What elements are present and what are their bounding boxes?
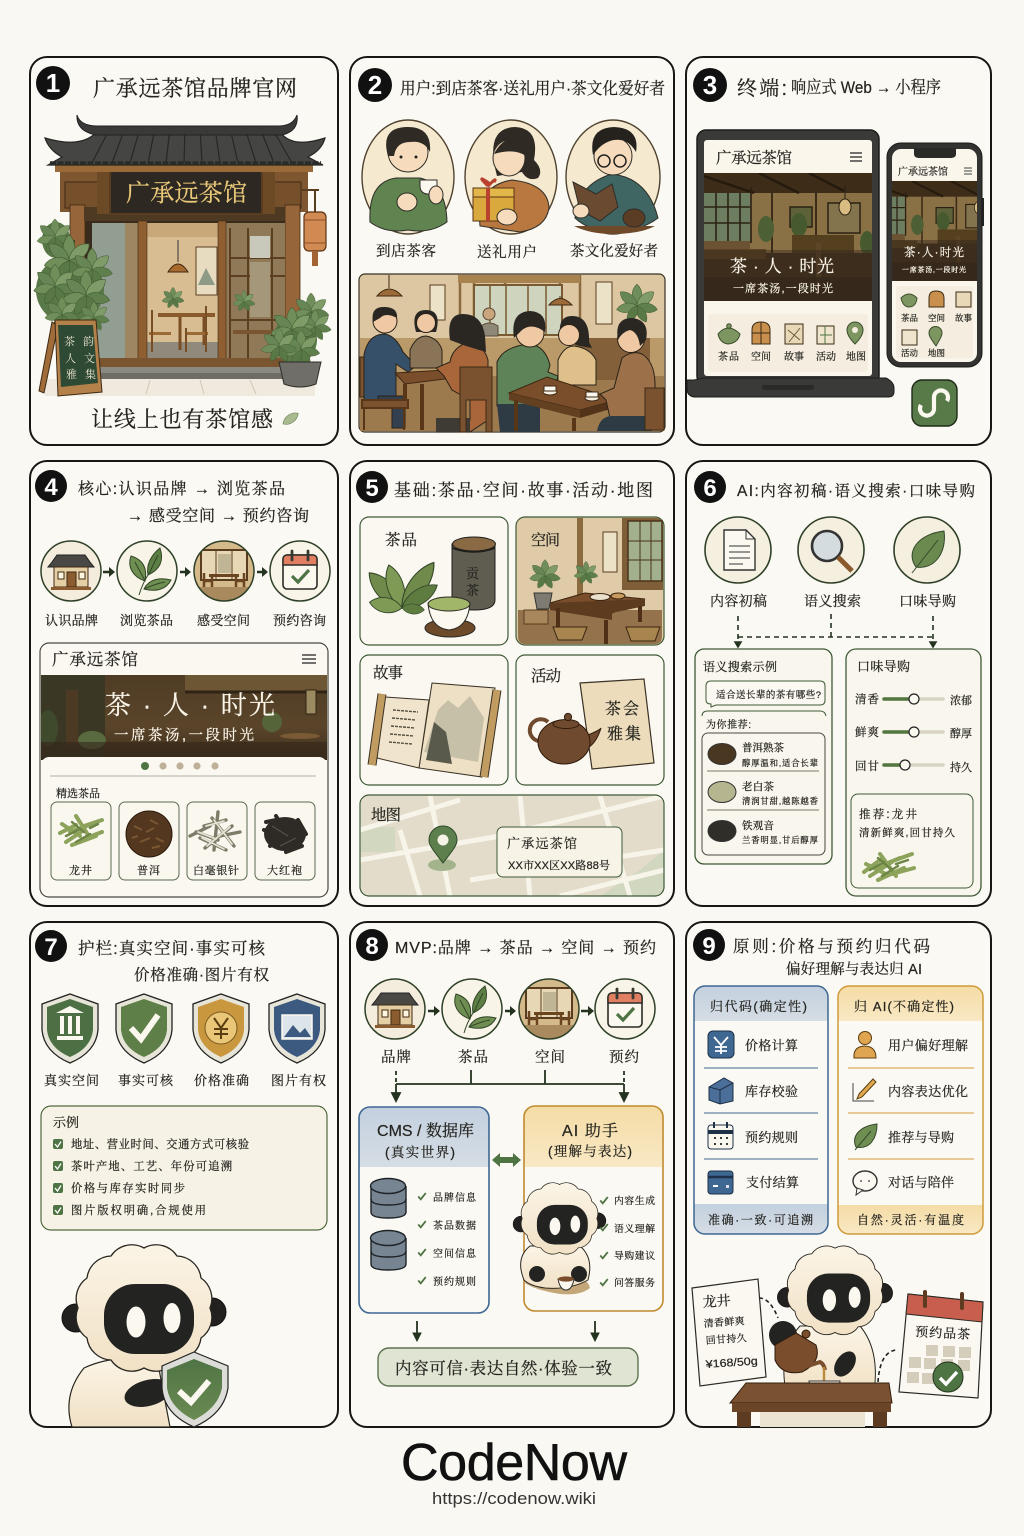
recommendation: 推荐:龙井 [859, 807, 918, 821]
mascot with tea [513, 1183, 606, 1294]
checklist: 预约规则 [433, 1275, 476, 1288]
brown woman [410, 336, 442, 368]
note card: 清香鲜爽 [703, 1314, 745, 1330]
sandwich board sign: 雅集 [66, 367, 96, 381]
green man [497, 344, 558, 406]
step flow [41, 541, 330, 601]
example box: 地址、营业时间、交通方式可核验 [71, 1137, 249, 1151]
result pill [378, 1348, 638, 1386]
phone nav icons: 茶品 [901, 313, 918, 323]
phone mockup [869, 143, 1002, 367]
tea card: longjing [51, 802, 111, 880]
arrow: bidirectional [492, 1153, 521, 1167]
example box: 茶叶产地、工艺、年份可追溯 [71, 1159, 232, 1173]
card: map [360, 795, 664, 896]
step labels: 品牌 [381, 1049, 411, 1066]
slider: freshness [855, 725, 972, 740]
card: map: 广承远茶馆 [507, 836, 577, 851]
laptop nav icons [718, 322, 866, 363]
result: white tea: 清润甘甜,越陈越香 [742, 796, 819, 806]
panel 6: AI [686, 461, 991, 906]
badge 5: 5 [365, 475, 379, 502]
panel 2: users [350, 57, 674, 445]
example box: 价格与库存实时同步 [71, 1181, 185, 1195]
phone mockup: 茶·人·时光 [904, 245, 964, 259]
calendar [899, 1292, 983, 1398]
card: semantic search example: 为你推荐: [706, 718, 751, 731]
title line 2: 偏好理解与表达归 AI [786, 960, 922, 978]
slider: aftertaste: 持久 [950, 760, 972, 774]
result: tieguanyin: 铁观音 [742, 819, 774, 832]
title: core: 核心:认识品牌 → 浏览茶品 [78, 480, 285, 498]
step labels: 浏览茶品 [120, 613, 173, 628]
step labels [381, 1048, 639, 1066]
column: code: 价格计算 [745, 1038, 798, 1053]
background guest [483, 308, 495, 320]
badge 3: 3 [703, 70, 717, 100]
icon: leaf [894, 517, 960, 583]
step labels: 茶品 [458, 1048, 488, 1066]
card: story [360, 655, 508, 785]
illustration: teahouse storefront: 广承远茶馆 [126, 180, 247, 207]
slider: freshness: 醇厚 [950, 726, 972, 740]
column: code: 支付结算 [746, 1175, 799, 1190]
icon: box [709, 1078, 733, 1104]
title: AI: AI:内容初稿·语义搜索·口味导购 [737, 481, 975, 500]
step labels: 认识品牌 [45, 613, 98, 628]
card: semantic search example: 适合送长辈的茶有哪些? [716, 689, 821, 701]
tea card: silver needle: 白毫银针 [193, 863, 239, 877]
shield: image rights [269, 994, 325, 1063]
title: terminals: 响应式 Web → 小程序 [791, 78, 941, 97]
tea card: da hong pao [255, 802, 315, 880]
dashed arrows [759, 1298, 896, 1382]
title line 2: 价格准确·图片有权 [134, 966, 269, 984]
label: 茶文化爱好者 [570, 242, 658, 260]
shield: real space [42, 994, 98, 1063]
card: tea: 贡 [466, 566, 480, 581]
title line 2: → 感受空间 → 预约咨询 [127, 507, 309, 525]
slider: aftertaste: 回甘 [855, 759, 880, 773]
table [730, 1383, 892, 1427]
laptop mockup: 一席茶汤,一段时光 [733, 281, 833, 295]
badge 5 [356, 471, 388, 503]
badge 8: 8 [365, 933, 379, 960]
note card: 龙井 [702, 1292, 731, 1310]
illustration: teahouse storefront [33, 115, 332, 396]
teapot [775, 1330, 825, 1384]
phone nav icons: 地图 [928, 348, 945, 358]
title: foundations: 基础:茶品·空间·故事·活动·地图 [394, 481, 653, 500]
checklist [418, 1191, 477, 1288]
illustration: people in teahouse [359, 274, 665, 432]
result: white tea [708, 780, 819, 806]
slogan: 让线上也有茶馆感 [91, 407, 273, 432]
laptop nav icons: 故事 [784, 350, 804, 363]
sandwich board sign: 茶韵 [64, 334, 94, 348]
result: white tea: 老白茶 [742, 780, 774, 793]
panel 5: foundations [350, 461, 674, 906]
checklist: 内容生成 [614, 1194, 655, 1207]
labels: 语义搜索 [804, 593, 861, 609]
column: code: 归代码(确定性) [710, 999, 807, 1014]
website mockup: 茶 · 人 · 时光 [105, 690, 275, 720]
laptop mockup: 茶 · 人 · 时光 [730, 257, 834, 276]
icon: leaf [855, 1124, 877, 1150]
labels [710, 593, 956, 609]
result: tieguanyin [708, 819, 819, 845]
badge 3 [693, 68, 727, 102]
badge 7 [35, 930, 67, 962]
step labels: 感受空间 [197, 613, 250, 628]
mascot with shield [62, 1245, 228, 1427]
recommendation: 清新鲜爽,回甘持久 [859, 826, 956, 839]
column: AI: 用户偏好理解 [888, 1038, 968, 1053]
laptop mockup [687, 130, 894, 397]
badge 7: 7 [44, 934, 58, 961]
website mockup [38, 643, 328, 897]
note card: 回甘持久 [705, 1331, 747, 1347]
tea card: puer [119, 802, 179, 880]
badge 2: 2 [368, 70, 382, 100]
title: MVP: MVP:品牌 → 茶品 → 空间 → 预约 [395, 939, 656, 957]
badge 2 [358, 68, 392, 102]
laptop mockup: 广承远茶馆 [716, 149, 792, 167]
plant: left shrub [33, 219, 113, 332]
card: CMS [359, 1107, 489, 1313]
laptop nav icons: 活动 [816, 350, 836, 363]
shield: accurate price [193, 994, 249, 1063]
website mockup: 精选茶品 [56, 786, 100, 800]
labels: 口味导购 [899, 593, 956, 609]
blue man [364, 334, 416, 400]
shield labels: 真实空间 [44, 1073, 99, 1088]
left table [395, 370, 452, 384]
checklist [600, 1194, 655, 1289]
label: 到店茶客 [376, 242, 436, 260]
panel 1: brand site [30, 57, 338, 445]
badge 1 [36, 66, 70, 100]
phone nav icons: 故事 [955, 313, 972, 323]
card: map: 地图 [371, 805, 401, 824]
column: AI: 自然·灵活·有温度 [857, 1212, 964, 1227]
card: map: XX市XX区XX路88号 [508, 859, 610, 872]
card: events [516, 655, 664, 785]
shield labels: 价格准确 [194, 1073, 249, 1088]
step labels: 预约咨询 [273, 613, 326, 628]
badge 6: 6 [703, 475, 717, 502]
result: puer: 普洱熟茶 [742, 741, 784, 754]
card: AI assistant [513, 1106, 663, 1311]
database icons [370, 1178, 406, 1270]
step labels: 预约 [609, 1049, 639, 1066]
panel 7: guardrails [30, 922, 338, 1427]
example box [41, 1106, 327, 1230]
laptop nav icons: 地图 [846, 350, 866, 363]
panel 4: core path [30, 461, 338, 906]
checklist: 茶品数据 [433, 1219, 476, 1232]
card: events: 活动 [531, 667, 561, 685]
avatar: gift buyer [465, 120, 557, 234]
calendar: 预约品茶 [915, 1324, 971, 1342]
shield labels [44, 1073, 326, 1088]
panel 9: principles [686, 922, 991, 1427]
card: tea: 茶 [466, 583, 479, 598]
badge 4 [35, 470, 67, 502]
sandwich board sign: 人文 [65, 352, 95, 365]
step labels [45, 613, 326, 628]
shield labels: 图片有权 [271, 1073, 326, 1088]
tea card: silver needle [187, 802, 247, 880]
phone mockup: 广承远茶馆 [898, 165, 948, 178]
avatar: tea lover [566, 120, 660, 234]
orange woman [436, 342, 488, 432]
title: terminals [737, 77, 941, 100]
column: code [694, 986, 828, 1234]
phone mockup: 一席茶汤,一段时光 [902, 265, 966, 274]
card: story: 故事 [373, 664, 403, 682]
checklist: 问答服务 [614, 1276, 655, 1289]
step flow [365, 979, 655, 1039]
badge 9 [693, 929, 725, 961]
column: AI [838, 986, 983, 1234]
note card: ¥168/50g [704, 1355, 758, 1371]
badge 9: 9 [702, 933, 716, 960]
card: CMS: CMS / 数据库 [377, 1122, 474, 1140]
card: taste guide: 口味导购 [857, 659, 910, 674]
slider: fragrance: 浓郁 [950, 693, 972, 707]
illustration: mascot serving tea [692, 1246, 983, 1427]
website mockup: 一席茶汤,一段时光 [114, 726, 254, 744]
title: guardrails: 护栏:真实空间·事实可核 [78, 939, 266, 958]
icon: calendar [708, 1122, 733, 1149]
brown man [600, 353, 655, 418]
badge 1: 1 [46, 68, 60, 98]
slider: fragrance [855, 692, 972, 707]
result: puer: 醇厚温和,适合长辈 [742, 758, 818, 768]
title: users: 用户:到店茶客·送礼用户·茶文化爱好者 [400, 79, 665, 98]
panel 8: MVP [350, 922, 674, 1427]
icon: small leaf [281, 410, 301, 427]
shield: verified facts [116, 994, 172, 1063]
badge 4: 4 [44, 474, 58, 501]
example box: 示例 [53, 1115, 79, 1130]
icon: user [854, 1032, 876, 1058]
icon: edit [853, 1079, 876, 1101]
slider: aftertaste [855, 759, 972, 774]
tea card: longjing: 龙井 [69, 863, 92, 877]
badge 6 [694, 471, 726, 503]
laptop nav icons: 空间 [751, 350, 771, 363]
sandwich board sign [39, 320, 102, 396]
result: tieguanyin: 兰香明显,甘后醇厚 [742, 835, 819, 845]
label: 送礼用户 [477, 244, 537, 261]
dashed connectors [735, 614, 936, 647]
card: space [516, 517, 664, 645]
result: puer [708, 741, 818, 768]
card: tea: 茶品 [385, 531, 417, 549]
card: semantic search example: 语义搜索示例 [703, 659, 777, 674]
panel 3: terminals [686, 57, 1002, 445]
title: terminals: 终端: [737, 77, 787, 100]
checklist: 导购建议 [614, 1249, 655, 1262]
logo: CodeNow: CodeNow [401, 1434, 627, 1492]
card: events: 茶会 [605, 700, 639, 718]
hanging lantern [302, 190, 326, 266]
icon: document [705, 517, 771, 583]
chair back [360, 357, 385, 397]
badge 8 [356, 929, 388, 961]
icon: mini program [912, 380, 957, 426]
example box: 图片版权明确,合规使用 [71, 1203, 206, 1217]
slider: fragrance: 清香 [855, 692, 880, 706]
step labels: 空间 [535, 1048, 565, 1066]
column: code: 库存校验 [745, 1084, 798, 1099]
checklist: 空间信息 [433, 1247, 477, 1260]
card: CMS: (真实世界) [385, 1145, 455, 1160]
shield labels: 事实可核 [118, 1073, 174, 1088]
plant: potted right [260, 293, 332, 387]
title: brand site: 广承远茶馆品牌官网 [93, 76, 297, 101]
card: events: 雅集 [607, 725, 641, 743]
result pill: 内容可信·表达自然·体验一致 [395, 1359, 612, 1378]
column: code: 准确·一致·可追溯 [708, 1212, 813, 1227]
url: https://codenow.wiki [432, 1489, 596, 1508]
tea card: da hong pao: 大红袍 [267, 863, 302, 877]
arrows to result [413, 1321, 599, 1341]
column: code: 预约规则 [745, 1130, 798, 1145]
tea card: puer: 普洱 [137, 863, 160, 877]
column: AI: 归 AI(不确定性) [854, 999, 954, 1014]
avatar: walk-in guest [362, 120, 454, 234]
right table [509, 377, 617, 410]
card: space: 空间 [531, 531, 560, 549]
phone nav icons [901, 291, 972, 358]
note card [692, 1279, 766, 1386]
cream woman [558, 346, 596, 385]
column: AI: 推荐与导购 [888, 1130, 954, 1145]
column: AI: 对话与陪伴 [888, 1175, 954, 1190]
phone nav icons: 空间 [928, 313, 945, 323]
slider: freshness: 鲜爽 [855, 725, 880, 739]
phone nav icons: 活动 [901, 348, 918, 358]
card: semantic search example [695, 649, 832, 864]
teacup [809, 1381, 840, 1400]
connectors [392, 1070, 628, 1101]
card: AI assistant: (理解与表达) [548, 1143, 632, 1159]
card: AI assistant: AI 助手 [562, 1122, 618, 1140]
title: principles: 原则:价格与预约归代码 [733, 937, 930, 956]
column: AI: 内容表达优化 [888, 1084, 968, 1099]
checklist: 品牌信息 [433, 1191, 477, 1204]
icon: magnifier [798, 517, 864, 583]
recommendation [851, 794, 973, 888]
card: tea [360, 517, 508, 645]
icon: speech bubble [853, 1171, 877, 1195]
laptop nav icons: 茶品 [718, 350, 739, 363]
website mockup: 广承远茶馆 [52, 650, 138, 669]
card: taste guide [846, 649, 981, 896]
labels: 内容初稿 [710, 593, 767, 609]
checklist: 语义理解 [614, 1222, 655, 1235]
icon: yen [708, 1031, 734, 1058]
icon: card [708, 1171, 733, 1194]
